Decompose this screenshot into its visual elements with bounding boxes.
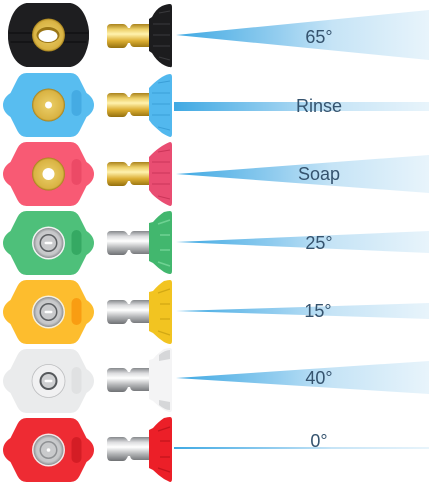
nozzle face: black: [8, 3, 89, 67]
row: 40 degree white nozzle: [3, 348, 429, 413]
label: Rinse: Rinse: [296, 96, 342, 116]
spray: 65 degree fan: [176, 10, 429, 60]
nozzle face: yellow: [3, 280, 94, 344]
label: 65: 65°: [305, 27, 333, 47]
row: 65 degree black nozzle: [8, 3, 429, 67]
label: Soap: Soap: [298, 164, 340, 184]
spray: 0 degree jet: [174, 447, 429, 449]
cap: pink: [149, 142, 172, 206]
label: 15: 15°: [304, 301, 332, 321]
cap: yellow: [149, 280, 172, 344]
nozzle face: white: [3, 349, 94, 413]
nozzle face: pink: [3, 142, 94, 206]
cap: black: [149, 4, 172, 67]
nozzle face: red: [3, 418, 94, 482]
fitting: steel: [107, 368, 149, 392]
label: 25: 25°: [305, 233, 333, 253]
cap: white: [149, 348, 172, 412]
row: 15 degree yellow nozzle: [3, 280, 429, 344]
fitting: brass: [107, 24, 149, 48]
fitting: brass: [107, 93, 149, 117]
spray: 25 degree fan: [176, 231, 429, 253]
label: 0: 0°: [310, 431, 328, 451]
row: soap pink nozzle: [3, 142, 429, 206]
row: 0 degree red nozzle: [3, 417, 429, 482]
fitting: steel: [107, 300, 149, 324]
cap: red: [149, 417, 172, 482]
row: rinse blue nozzle: [3, 73, 429, 137]
cap: green: [149, 211, 172, 274]
fitting: steel: [107, 231, 149, 255]
label: 40: 40°: [305, 368, 333, 388]
fitting: brass: [107, 162, 149, 186]
spray: rinse band: [174, 102, 429, 111]
nozzle face: blue: [3, 73, 94, 137]
row: 25 degree green nozzle: [3, 211, 429, 275]
cap: blue: [149, 74, 172, 137]
spray: 40 degree fan: [176, 361, 429, 394]
spray: soap fan: [176, 155, 429, 193]
nozzle face: green: [3, 211, 94, 275]
fitting: steel: [107, 437, 149, 461]
spray: 15 degree fan: [176, 303, 429, 319]
